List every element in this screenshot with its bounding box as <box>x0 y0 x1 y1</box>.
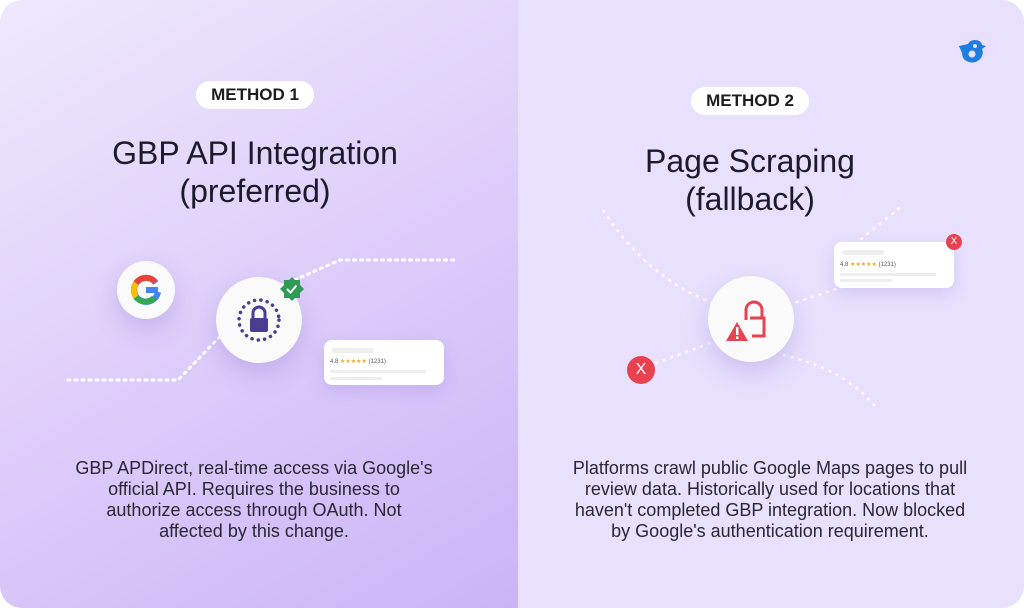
text: method 1 description <box>75 458 433 541</box>
review card <box>324 340 444 385</box>
text: method 2 description: review data. Historically used for locations that <box>585 479 955 499</box>
heading: method 1: (preferred) <box>179 173 331 209</box>
diagram: API flow <box>66 258 455 382</box>
text: method 1 description: GBP APDirect, real-time access via Google's <box>75 458 433 478</box>
text: method 1 description: official API. Requires the business to <box>108 479 400 499</box>
icon: small x <box>946 234 962 250</box>
badge: method 1 <box>196 81 314 109</box>
review card: 4.8 ★★★★★ (1231) <box>840 262 896 268</box>
panel: method 2 <box>518 0 1024 608</box>
text: method 2 description: haven't completed GBP integration. Now blocked <box>575 500 965 520</box>
text: method 1 description: affected by this change. <box>159 521 349 541</box>
badge: method 2: METHOD 2 <box>706 91 794 110</box>
badge: method 1: METHOD 1 <box>211 85 299 104</box>
heading: method 2: Page Scraping <box>645 143 855 179</box>
icon: broken lock <box>708 276 794 362</box>
icon: large x <box>627 356 655 384</box>
text: method 1 description: authorize access through OAuth. Not <box>106 500 402 520</box>
diagram: scraping lines <box>602 207 900 407</box>
heading: method 2 <box>645 143 855 217</box>
logo <box>959 40 986 62</box>
icon: large x: X <box>636 361 646 378</box>
text: method 2 description: Platforms crawl public Google Maps pages to pull <box>573 458 967 478</box>
text: method 2 description <box>573 458 967 541</box>
heading: method 1 <box>112 135 398 209</box>
icon: google <box>117 261 175 319</box>
review card: 4.8 ★★★★★ (1231) <box>330 359 386 365</box>
icon: secure lock <box>216 277 302 363</box>
icon: verified check <box>280 277 304 301</box>
badge: method 2 <box>691 87 809 115</box>
icon: small x: X <box>951 236 957 247</box>
panel: method 1 <box>0 0 518 608</box>
review card <box>834 242 954 288</box>
heading: method 2: (fallback) <box>685 181 815 217</box>
text: method 2 description: by Google's authentication requirement. <box>611 521 929 541</box>
heading: method 1: GBP API Integration <box>112 135 398 171</box>
